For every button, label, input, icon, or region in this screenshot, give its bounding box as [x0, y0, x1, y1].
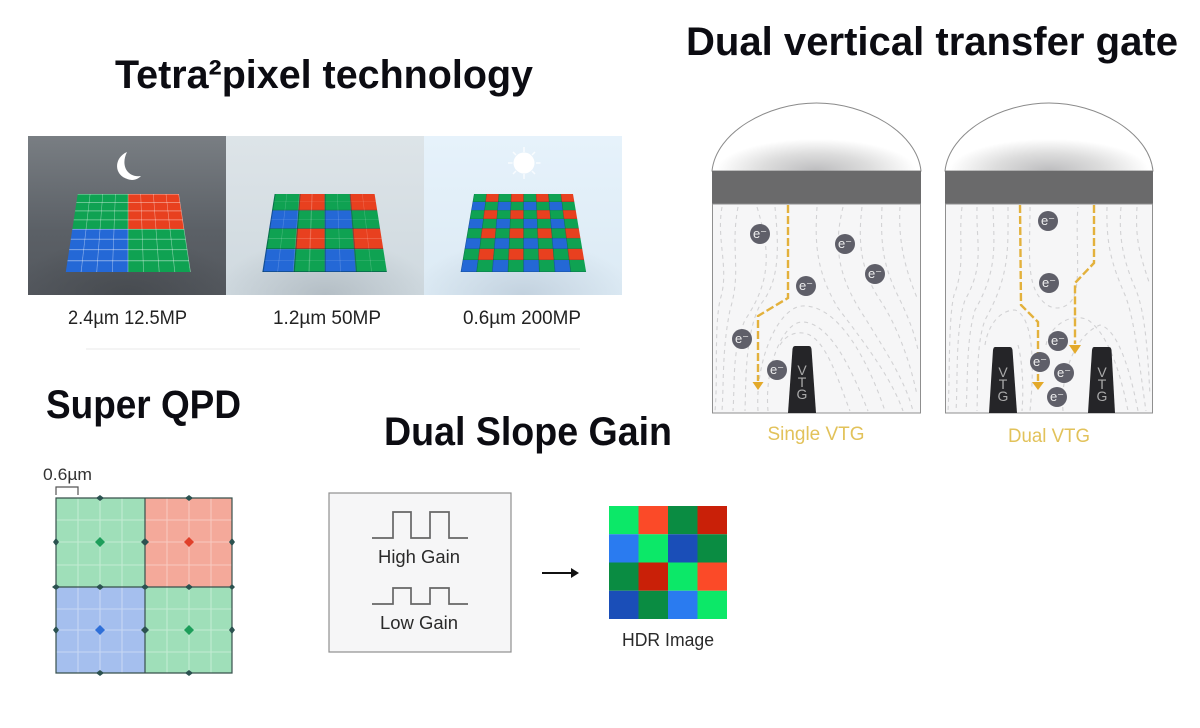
- electron transfer path right: [1069, 205, 1094, 354]
- label: Low Gain: Low Gain: [380, 613, 458, 633]
- caption: 1.2um 50MP: 1.2µm 50MP: [273, 308, 381, 329]
- field lines: [715, 207, 918, 411]
- electrons: e⁻: [753, 226, 767, 241]
- pixel grid: 4 cells: [66, 194, 191, 272]
- dimension label: 0.6µm: [43, 465, 92, 484]
- label: Dual VTG: Dual VTG: [1008, 426, 1090, 447]
- panel: low light 2.4um: [28, 136, 226, 295]
- panel: medium light 1.2um: [226, 136, 424, 295]
- electrons: [732, 224, 885, 380]
- dimension bracket: [56, 487, 78, 495]
- title: Super QPD: Super QPD: [46, 383, 241, 427]
- VTG gate: G: [797, 386, 807, 402]
- label: High Gain: High Gain: [378, 547, 460, 567]
- VTG gate left: [989, 347, 1017, 413]
- label: HDR Image: HDR Image: [622, 630, 714, 650]
- low gain waveform: [372, 588, 468, 604]
- silicon body: [946, 204, 1152, 413]
- VTG gate right: G: [1097, 388, 1107, 404]
- microlens dome: [945, 103, 1153, 171]
- title: Dual vertical transfer gate: Dual vertical transfer gate: [686, 20, 1178, 64]
- QPD cells: [52, 495, 235, 676]
- VTG gate right: [1088, 347, 1115, 413]
- arrow: [542, 568, 579, 578]
- VTG gate right: V: [1097, 364, 1107, 380]
- VTG gate right: T: [1098, 376, 1107, 392]
- panel: bright light 0.6um: [424, 136, 622, 295]
- electrons: e⁻: [1057, 365, 1071, 380]
- pixel grid: 16 cells: [262, 194, 387, 272]
- diagram: Dual Slope Gain box: [329, 493, 511, 652]
- diagram: Super QPD grid: [43, 465, 235, 676]
- panel: Tetra2pixel comparison: [28, 136, 622, 350]
- caption: 0.6um 200MP: 0.6µm 200MP: [463, 308, 581, 329]
- VTG gate left: T: [999, 376, 1008, 392]
- high gain waveform: [372, 512, 468, 538]
- caption: 2.4um 12.5MP: 2.4µm 12.5MP: [68, 308, 187, 329]
- title: Dual Slope Gain: Dual Slope Gain: [384, 410, 672, 454]
- microlens dome: [712, 103, 921, 171]
- electrons: e⁻: [770, 362, 784, 377]
- electron transfer path left: [1020, 205, 1044, 390]
- VTG gate: [788, 346, 816, 413]
- electrons: e⁻: [799, 278, 813, 293]
- VTG gate: T: [798, 374, 807, 390]
- field lines: [948, 207, 1150, 411]
- HDR image grid: [609, 506, 727, 619]
- silicon body: [712, 204, 920, 413]
- icon: sun: [508, 147, 540, 179]
- electrons: e⁻: [1041, 213, 1055, 228]
- box: [329, 493, 511, 652]
- electrons: e⁻: [1051, 333, 1065, 348]
- diagram: Single VTG pixel: [712, 103, 921, 445]
- electrons: e⁻: [735, 331, 749, 346]
- electrons: e⁻: [838, 236, 852, 251]
- icon: moon: [117, 152, 141, 180]
- title: Tetra2pixel technology: Tetra²pixel technology: [115, 53, 534, 97]
- dark band: [712, 171, 921, 204]
- VTG gate: V: [797, 362, 807, 378]
- electrons: e⁻: [1050, 389, 1064, 404]
- label: Single VTG: Single VTG: [768, 424, 864, 445]
- pixel grid: 64 cells: [461, 194, 586, 272]
- electrons: [1030, 211, 1074, 407]
- diagram: Dual VTG pixel: [945, 103, 1153, 447]
- electrons: e⁻: [868, 266, 882, 281]
- electrons: e⁻: [1033, 354, 1047, 369]
- dark band: [945, 171, 1153, 204]
- electron transfer path: [752, 205, 788, 390]
- electrons: e⁻: [1042, 275, 1056, 290]
- VTG gate left: G: [998, 388, 1008, 404]
- VTG gate left: V: [998, 364, 1008, 380]
